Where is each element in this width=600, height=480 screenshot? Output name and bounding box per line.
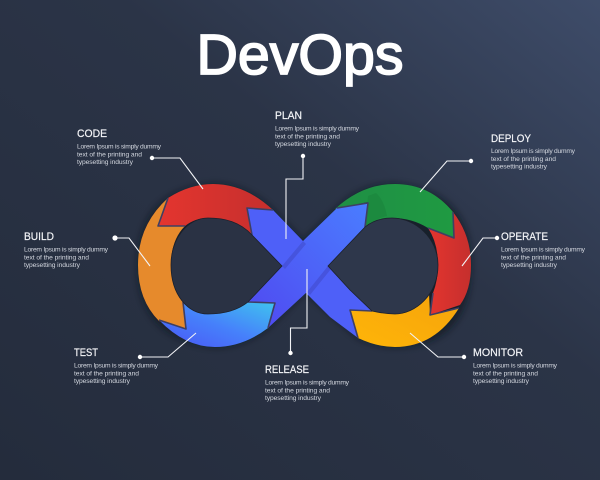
- label: plan: PLAN: [275, 110, 302, 122]
- crossing shadow: lower: [307, 266, 331, 295]
- label: release: typesetting industry: [265, 395, 322, 402]
- label: monitor: MONITOR: [473, 347, 523, 359]
- label: build: BUILD: [24, 231, 54, 243]
- label: code: CODE: [77, 128, 107, 140]
- leader: release: [288, 269, 307, 355]
- label: monitor: text of the printing and: [473, 370, 538, 377]
- segment: monitor yellow: [350, 293, 459, 347]
- label: plan: [275, 110, 360, 148]
- head outline: build arrow: [159, 302, 186, 329]
- label: code: typesetting industry: [77, 159, 134, 166]
- label: test: [74, 347, 159, 385]
- hole: right loop: [328, 218, 438, 314]
- label: monitor: Lorem Ipsum is simply dummy: [473, 362, 558, 370]
- label: deploy: typesetting industry: [491, 164, 548, 171]
- label: test: text of the printing and: [74, 370, 139, 377]
- label: code: Lorem Ipsum is simply dummy: [77, 144, 162, 150]
- head outline: monitor tail: [350, 310, 372, 338]
- crossing shadow: upper: [282, 241, 306, 269]
- leader: test: [138, 333, 196, 359]
- segment: operate red: [428, 212, 471, 315]
- label: plan: Lorem Ipsum is simply dummy: [275, 126, 360, 132]
- label: release: [265, 364, 350, 402]
- label: deploy: Lorem Ipsum is simply dummy: [491, 148, 576, 155]
- label: release: Lorem Ipsum is simply dummy: [265, 380, 350, 386]
- label: code: text of the printing and: [77, 151, 142, 158]
- label: test: typesetting industry: [74, 378, 131, 385]
- segment: release back band: [247, 208, 372, 338]
- leader: monitor: [410, 333, 466, 359]
- head outline: test arrow: [248, 302, 275, 328]
- label: operate: OPERATE: [501, 231, 548, 243]
- label: test: TEST: [74, 347, 98, 359]
- hole: left loop: [171, 218, 282, 314]
- label: test: Lorem Ipsum is simply dummy: [74, 362, 159, 370]
- label: code: [77, 128, 162, 166]
- head outline: release arrow: [247, 208, 273, 235]
- head outline: operate arrow: [430, 293, 459, 315]
- leader: build: [112, 235, 150, 266]
- label: plan: typesetting industry: [275, 141, 332, 148]
- segment: deploy green: [335, 184, 454, 238]
- label: build: Lorem Ipsum is simply dummy: [24, 246, 109, 254]
- label: deploy: [491, 133, 576, 171]
- label: operate: Lorem Ipsum is simply dummy: [501, 246, 586, 254]
- head outline: deploy arrow: [428, 212, 454, 238]
- head outline: plan arrow: [337, 203, 368, 227]
- label: monitor: [473, 347, 558, 385]
- label: operate: text of the printing and: [501, 254, 566, 261]
- label: release: RELEASE: [265, 364, 309, 376]
- segment: test blue: [159, 302, 275, 347]
- texture patch on green: [365, 193, 387, 228]
- label: operate: typesetting industry: [501, 262, 558, 269]
- segment: build orange: [138, 198, 186, 329]
- leader: operate: [462, 236, 499, 266]
- segment: plan front band: [248, 203, 368, 328]
- label: plan: text of the printing and: [275, 133, 340, 140]
- leader: code: [150, 156, 203, 189]
- leader: deploy: [420, 159, 473, 192]
- leader: plan: [286, 154, 305, 239]
- title: DevOps: [196, 23, 404, 87]
- segment: code red: [158, 184, 273, 235]
- label: monitor: typesetting industry: [473, 378, 530, 385]
- infinity loop: [138, 184, 471, 347]
- label: build: [24, 231, 109, 269]
- label: build: typesetting industry: [24, 262, 81, 269]
- loop shadow: [138, 184, 471, 347]
- head outline: code tail: [158, 198, 185, 226]
- label: deploy: DEPLOY: [491, 133, 532, 145]
- label: deploy: text of the printing and: [491, 156, 556, 163]
- label: operate: [501, 231, 586, 269]
- label: release: text of the printing and: [265, 387, 330, 394]
- label: build: text of the printing and: [24, 254, 89, 261]
